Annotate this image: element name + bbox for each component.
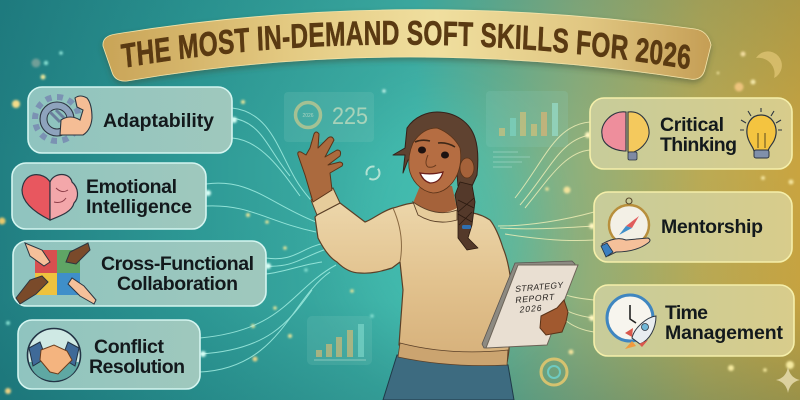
crescent moon decoration xyxy=(756,51,782,78)
report title: REPORT xyxy=(515,292,556,305)
faint donut dashboard panel: 225 xyxy=(332,103,368,130)
icon: clock and rocket xyxy=(607,295,656,349)
ear xyxy=(460,158,474,178)
label: Thinking xyxy=(660,134,737,156)
card: Critical Thinking xyxy=(590,98,792,169)
hair xyxy=(393,112,478,186)
stream glow points left xyxy=(200,117,271,357)
label: Management xyxy=(665,322,784,344)
card: Emotional Intelligence xyxy=(12,163,206,229)
report title: STRATEGY xyxy=(515,280,564,294)
card: Conflict Resolution xyxy=(18,320,200,389)
cuff xyxy=(311,188,340,215)
icon: handshake xyxy=(28,328,80,382)
card: Adaptability xyxy=(28,87,232,153)
sweater body and raised arm xyxy=(315,203,510,362)
face xyxy=(409,128,461,193)
label: Cross-Functional xyxy=(101,253,254,275)
faint donut dashboard panel xyxy=(284,92,374,142)
label xyxy=(101,253,254,295)
ring decorations xyxy=(366,166,567,385)
icon: light bulb xyxy=(740,108,782,158)
label: Resolution xyxy=(89,356,185,378)
label: Mentorship xyxy=(661,216,763,238)
nose xyxy=(426,155,436,167)
label xyxy=(660,114,737,156)
icon: brain xyxy=(602,112,649,160)
label: Time xyxy=(665,302,708,324)
faint bar chart panel bottom xyxy=(307,316,372,365)
label xyxy=(665,302,784,344)
braid xyxy=(455,182,478,250)
card: Mentorship xyxy=(594,192,792,262)
card: Cross-Functional Collaboration xyxy=(13,241,266,306)
faint bar chart panel top xyxy=(486,91,568,167)
icon: puzzle and hands xyxy=(16,243,96,304)
label xyxy=(86,176,192,218)
person illustration xyxy=(298,112,578,400)
collar xyxy=(413,202,457,222)
label: Intelligence xyxy=(86,196,192,218)
neck xyxy=(413,186,457,213)
sweater hem xyxy=(398,343,508,366)
sleeve crease xyxy=(393,208,401,262)
card: Time Management xyxy=(594,285,794,356)
report title: 2026 xyxy=(519,303,542,315)
raised hand xyxy=(298,132,343,202)
title banner xyxy=(101,9,714,86)
energy streams from right cards to person xyxy=(498,122,594,332)
smile xyxy=(420,172,443,183)
report title xyxy=(512,280,564,315)
label: Conflict xyxy=(94,336,164,358)
brows xyxy=(415,140,455,147)
jeans xyxy=(383,355,514,400)
label: Emotional xyxy=(86,176,177,198)
label xyxy=(89,336,185,378)
holding hand xyxy=(540,300,568,335)
faint donut dashboard panel: 2026 xyxy=(302,113,314,119)
label: Collaboration xyxy=(117,273,238,295)
hair tie xyxy=(462,225,471,229)
energy streams from left cards to person xyxy=(200,108,336,372)
report xyxy=(482,261,578,348)
braid strand marks xyxy=(458,198,474,225)
icon: heart and brain xyxy=(22,174,78,220)
icon: gear and flexed arm xyxy=(35,96,92,141)
icon: compass in hand xyxy=(601,198,650,257)
sparkle star watermark xyxy=(776,367,800,393)
label: Adaptability xyxy=(103,110,214,132)
stream glow points right xyxy=(585,132,595,321)
label: Critical xyxy=(660,114,724,136)
eyes xyxy=(418,146,449,158)
title text: THE MOST IN-DEMAND SOFT SKILLS FOR 2026 xyxy=(120,20,690,69)
